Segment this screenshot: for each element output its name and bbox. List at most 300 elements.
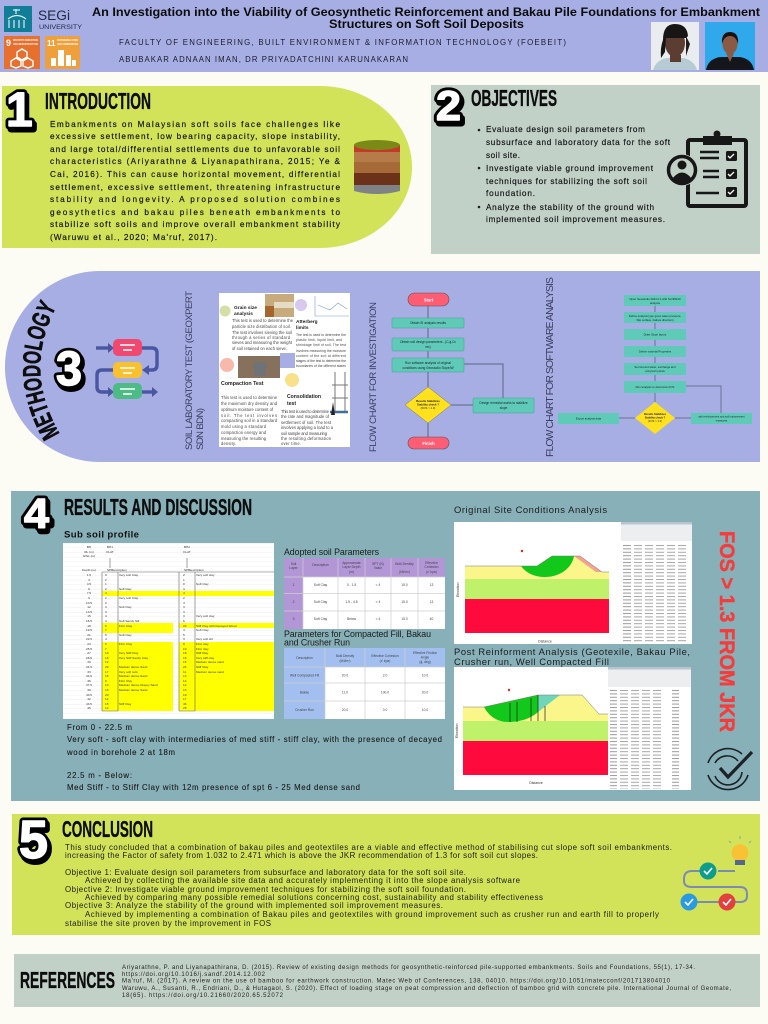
flow chart: software analysis bbox=[558, 295, 752, 434]
BH1 descriptions: Soft Clay bbox=[119, 605, 132, 609]
heading: original site conditions: Original Site Conditions Analysis bbox=[454, 504, 607, 515]
BH1 SPT column: 9 bbox=[105, 679, 107, 683]
table: adopted soil parameters: 1 bbox=[293, 583, 295, 587]
compaction test: the maximum dry density and bbox=[221, 401, 278, 406]
heading: post reinforcement analysis: Post Reinforment Analysis (Geotexile, Bakau Pile, bbox=[454, 646, 690, 657]
depth column: 39 bbox=[87, 688, 91, 692]
BH2 SPT column: 15 bbox=[183, 660, 187, 664]
sub soil description: wood in borehole 2 at 18m bbox=[66, 748, 175, 757]
SDG 9 badge: INDUSTRY INNOVATION bbox=[13, 38, 38, 42]
table: compacted fill parameters bbox=[284, 648, 445, 719]
grain size analysis: The test involves sieving the soil bbox=[232, 330, 292, 335]
table: borehole log: SPT bbox=[107, 568, 113, 572]
decision diamond bbox=[635, 402, 675, 434]
step: ground water: entry/exit points bbox=[645, 369, 665, 373]
depth column: 15 bbox=[87, 614, 91, 618]
chart: post reinforcement analysis bbox=[454, 667, 691, 790]
table: borehole log: FLAT bbox=[183, 550, 191, 554]
number 4: 4 bbox=[24, 490, 50, 537]
grain size analysis: Grain size bbox=[234, 305, 257, 311]
table: compacted fill parameters: 100.0 bbox=[381, 690, 389, 694]
table: adopted soil parameters: 15.0 bbox=[401, 617, 408, 621]
sub soil description: Very soft - soft clay with intermediaries of med stiff - stiff clay, with the presence of decayed bbox=[67, 735, 442, 744]
table: compacted fill parameters: 20.0 bbox=[422, 690, 428, 694]
depth column: 22.5 bbox=[86, 637, 92, 641]
heading: conclusion: CONCLUSION bbox=[62, 816, 153, 842]
table: adopted soil parameters: Description bbox=[312, 563, 329, 567]
number 2: 2 bbox=[436, 82, 461, 129]
compaction test: compaction energy and bbox=[221, 430, 267, 435]
conclusion text: Objective 2: Investigate viable ground improvement techniques for stabilizing the soft soil foundation. bbox=[65, 885, 466, 894]
depth column: 21 bbox=[87, 633, 91, 637]
step: run analysis: Run analysis to determine FOS bbox=[636, 385, 675, 389]
table: adopted soil parameters: 3 bbox=[293, 617, 295, 621]
depth column: 36 bbox=[87, 679, 91, 683]
depth column: 13.5 bbox=[86, 610, 92, 614]
number 4: 4 bbox=[24, 490, 50, 537]
table: compacted fill parameters: Description bbox=[296, 656, 313, 660]
poster title bbox=[92, 5, 760, 31]
BH1 descriptions: Very Stiff Sandy Clay bbox=[119, 656, 148, 660]
step: define material: Define material Properties bbox=[639, 350, 672, 354]
heading: adopted soil parameters: Adopted soil Parameters bbox=[284, 547, 380, 557]
panel: methodology bbox=[5, 271, 760, 462]
BH2 SPT column: 25 bbox=[183, 706, 187, 710]
table: adopted soil parameters: Effective bbox=[425, 561, 438, 565]
reference list: https://doi.org/10.1016/j.sandf.2014.12.002 bbox=[122, 972, 266, 978]
BH2 SPT column: 16 bbox=[183, 651, 187, 655]
BH1 descriptions: Firm Clay bbox=[119, 624, 133, 628]
sub soil description: From 0 - 22.5 m bbox=[67, 723, 132, 732]
table: borehole log: Depth (m) bbox=[82, 568, 96, 572]
SDG 11 badge: SUSTAINABLE CITIES bbox=[57, 39, 78, 42]
step: add reinforcement: add reinforcement and soil improvement bbox=[698, 414, 745, 418]
BH2 SPT column: 4 bbox=[183, 591, 185, 595]
BH2 SPT column: 14 bbox=[183, 683, 187, 687]
BH2 descriptions: Soft Clay bbox=[196, 628, 209, 632]
label: soil laboratory test bbox=[184, 291, 206, 450]
table: borehole log: SPT bbox=[184, 568, 190, 572]
number 3: 3 bbox=[56, 343, 82, 396]
depth column: 18 bbox=[87, 624, 91, 628]
step: define analysis: Slip surface, Failure direction) bbox=[636, 318, 674, 322]
icon: process flow bbox=[96, 339, 158, 399]
table: adopted soil parameters: 40 bbox=[430, 617, 433, 621]
table: adopted soil parameters: < 4 bbox=[376, 583, 380, 587]
chart: original slope analysis bbox=[454, 522, 692, 644]
BH2 SPT column: 1 bbox=[183, 578, 185, 582]
BH2 SPT column: 4 bbox=[183, 628, 185, 632]
consolidation test: Consolidation bbox=[287, 394, 321, 400]
depth column: 30 bbox=[87, 660, 91, 664]
table: borehole log: RL (m) bbox=[84, 550, 94, 554]
table: compacted fill parameters: Effective Cohesion bbox=[371, 654, 399, 658]
BH2 SPT column: 0 bbox=[183, 582, 185, 586]
table: adopted soil parameters: Approximate bbox=[342, 561, 361, 565]
BH2 SPT column: 3 bbox=[183, 605, 185, 609]
step: define analysis bbox=[624, 312, 686, 323]
introduction text: settlement, excessive settlement, threatening infrastructure bbox=[50, 183, 340, 192]
BH2 SPT column: 8 bbox=[183, 642, 185, 646]
atterberg limits: stages of the test to determine the bbox=[296, 359, 346, 363]
finish bbox=[408, 437, 449, 449]
conclusion text: Objective 1: Evaluate design soil parameters from subsurface and laboratory data for the soft soil site. bbox=[65, 868, 466, 877]
table: compacted fill parameters: 10.0 bbox=[422, 708, 428, 712]
BH1 descriptions: Soft Clay bbox=[119, 633, 132, 637]
decision diamond: Stability check ? bbox=[417, 402, 439, 406]
BH1 descriptions: Medium dense Sand bbox=[119, 665, 148, 669]
grain size analysis: This test is used to determine the bbox=[232, 318, 294, 323]
BH1 SPT column: 18 bbox=[105, 656, 109, 660]
step: define material bbox=[624, 346, 686, 357]
BH2 SPT column: 24 bbox=[183, 624, 187, 628]
step: add reinforcement: measures bbox=[716, 418, 728, 422]
panel: references bbox=[14, 954, 760, 1007]
faculty line: FACULTY OF ENGINEERING, BUILT ENVIRONMENT & INFORMATION TECHNOLOGY (FOEBEIT) bbox=[119, 38, 566, 47]
BH2 SPT column: 3 bbox=[183, 587, 185, 591]
consolidation test: settlement of soil. The test bbox=[281, 420, 332, 425]
consolidation test: the rate and magnitude of bbox=[281, 414, 330, 419]
BH2 SPT column: 19 bbox=[183, 693, 187, 697]
BH2 SPT column: 2 bbox=[183, 596, 185, 600]
SEGi University logo: UNIVERSITY bbox=[39, 24, 82, 31]
number 4: 4 bbox=[26, 493, 52, 540]
BH2 SPT column: 6 bbox=[183, 619, 185, 623]
depth column: 27 bbox=[87, 651, 91, 655]
step: draw slope: Draw Slope layout bbox=[644, 332, 667, 336]
BH2 descriptions: Stiff Clay bbox=[196, 651, 209, 655]
step: open geostudio: analysis bbox=[650, 301, 661, 305]
BH1 SPT column: 7 bbox=[105, 647, 107, 651]
BH2 SPT column: 5 bbox=[183, 633, 185, 637]
panel: results and discussion bbox=[11, 490, 760, 801]
objectives bullet list: foundation. bbox=[486, 189, 535, 198]
grain size analysis: particle size distribution of soil. bbox=[232, 324, 291, 329]
BH1 SPT column: 12 bbox=[105, 660, 109, 664]
BH1 SPT column: 20 bbox=[105, 665, 109, 669]
SDG 11 badge bbox=[45, 36, 80, 69]
atterberg limits: involves measuring the moisture bbox=[296, 349, 346, 353]
heading: results and discussion: RESULTS AND DISCUSSION bbox=[64, 494, 252, 520]
table: borehole log bbox=[63, 543, 274, 719]
number 1: 1 bbox=[8, 87, 35, 140]
BH2 descriptions: Firm clay bbox=[196, 647, 209, 651]
step: obtain design parameters: etc) bbox=[425, 345, 431, 349]
depth column: 7.5 bbox=[87, 591, 91, 595]
BH1 SPT column: 0 bbox=[105, 573, 107, 577]
conclusion text bbox=[65, 843, 672, 928]
depth column: 3 bbox=[88, 578, 90, 582]
depth column: 31.5 bbox=[86, 665, 92, 669]
step: ground water: Set Ground water, surcharge and bbox=[634, 365, 676, 369]
BH1 descriptions: Firm Clay bbox=[119, 679, 133, 683]
introduction text: (Waruwu et al., 2020; Ma'ruf, 2017). bbox=[50, 233, 217, 242]
heading: introduction: INTRODUCTION bbox=[45, 88, 151, 114]
table: adopted soil parameters: (c' kpa) bbox=[426, 570, 437, 574]
depth column: 42 bbox=[87, 697, 91, 701]
SEGi University logo: SEGi bbox=[38, 8, 70, 23]
conclusion text: Achieved by implementing a combination of Bakau piles and geotextiles with ground improvement such as crusher run and earth fill to properly bbox=[85, 910, 659, 919]
BH1 SPT column: 2 bbox=[105, 578, 107, 582]
BH2 SPT column: 17 bbox=[183, 697, 187, 701]
BH2 SPT column: 3 bbox=[183, 614, 185, 618]
depth column: 45 bbox=[87, 706, 91, 710]
table: compacted fill parameters: 2.0 bbox=[383, 674, 387, 678]
BH2 descriptions: Medium dense sand bbox=[196, 670, 224, 674]
label: soil laboratory test: SOIL LABORATORY TEST (GEOXPERT bbox=[184, 291, 195, 450]
introduction text: geosythetics and bakau piles beneath embankments to bbox=[50, 208, 340, 217]
SEGi University logo bbox=[4, 6, 82, 32]
table: compacted fill parameters: Crusher Run bbox=[295, 708, 314, 712]
label: flow chart for investigation: FLOW CHART FOR INVESTIGATION bbox=[368, 302, 379, 452]
step: design remedial works: slope bbox=[500, 406, 508, 410]
table: compacted fill parameters: (kN/m³) bbox=[340, 659, 350, 663]
table: adopted soil parameters: 13 bbox=[430, 583, 433, 587]
panel: introduction bbox=[2, 84, 412, 248]
table: adopted soil parameters: < 4 bbox=[376, 600, 380, 604]
table: adopted soil parameters: 13 bbox=[430, 600, 433, 604]
table: adopted soil parameters: Below bbox=[347, 617, 357, 621]
depth column: 24 bbox=[87, 642, 91, 646]
BH1 SPT column: 17 bbox=[105, 670, 109, 674]
BH1 SPT column: 16 bbox=[105, 688, 109, 692]
flow chart: investigation bbox=[392, 293, 534, 449]
grain size analysis: through a series of standard bbox=[232, 335, 291, 340]
step: design remedial works: Design remedial works to stabilize bbox=[479, 401, 528, 405]
heading: objectives: OBJECTIVES bbox=[471, 85, 557, 111]
panel: conclusion bbox=[12, 810, 760, 935]
reference list bbox=[122, 965, 731, 999]
author photo 1 bbox=[651, 22, 699, 70]
step: open geostudio bbox=[624, 295, 686, 306]
BH2 descriptions: Stiff Clay bbox=[196, 665, 209, 669]
authors line: ABUBAKAR ADNAAN IMAN, DR PRIYADATCHINI KARUNAKARAN bbox=[119, 55, 408, 64]
start bbox=[408, 293, 449, 306]
introduction text: Cai, 2016). This can cause horizontal movement, differential bbox=[50, 170, 340, 179]
table: compacted fill parameters: 20.0 bbox=[342, 708, 348, 712]
BH1 SPT column: 18 bbox=[105, 674, 109, 678]
reference list: 18(65). https://doi.org/10.21660/2020.65.52072 bbox=[122, 993, 284, 999]
poster title: An Investigation into the Viability of Geosynthetic Reinforcement and Bakau Pile Foundations for Embankment bbox=[92, 5, 760, 19]
atterberg limits: limits bbox=[296, 325, 309, 331]
BH1 SPT column: 3 bbox=[105, 610, 107, 614]
number 5: 5 bbox=[19, 810, 48, 870]
BH2 SPT column: 11 bbox=[183, 670, 186, 674]
depth column: 37.5 bbox=[86, 683, 92, 687]
atterberg limits bbox=[295, 296, 349, 368]
sub soil description: 22.5 m - Below: bbox=[67, 771, 132, 780]
compaction test: optimum moisture content of bbox=[221, 407, 274, 412]
BH1 SPT column: 12 bbox=[105, 697, 109, 701]
sub soil description: Med Stiff - to Stiff Clay with 12m presence of spt 6 - 25 Med dense sand bbox=[67, 783, 360, 792]
objectives bullet list: subsurface and laboratory data for the soft bbox=[486, 138, 671, 147]
objectives bullet list: Analyze the stability of the ground with bbox=[486, 203, 654, 212]
atterberg limits: shrinkage limit of soil. The test bbox=[296, 343, 346, 347]
depth column: 9 bbox=[88, 596, 90, 600]
number 2: 2 bbox=[438, 85, 463, 132]
BH1 descriptions: Medium dense Clayey Sand bbox=[119, 683, 158, 687]
step: obtain design parameters bbox=[392, 338, 464, 351]
heading: methodology (curved along the panel edge): METHODOLOGY bbox=[22, 298, 60, 442]
table: adopted soil parameters: 15.0 bbox=[401, 600, 408, 604]
software results window bbox=[621, 522, 692, 644]
introduction text: and large total/differential settlements due to unfavorable soil bbox=[50, 145, 340, 154]
table: compacted fill parameters: Bulk Density bbox=[336, 654, 355, 658]
heading: post reinforcement analysis bbox=[454, 646, 690, 667]
header band bbox=[0, 0, 768, 72]
number 3: 3 bbox=[58, 346, 84, 399]
BH1 SPT column: 5 bbox=[105, 633, 107, 637]
number 5: 5 bbox=[21, 813, 50, 873]
objectives bullet list: Evaluate design soil parameters from bbox=[486, 125, 645, 134]
BH1 SPT column: 2 bbox=[105, 596, 107, 600]
conclusion text: stabilise the site proven by the improvement in FOS bbox=[65, 919, 271, 928]
consolidation test: over time. bbox=[281, 441, 301, 446]
step: add reinforcement bbox=[691, 413, 752, 424]
table: adopted soil parameters: Soft Clay bbox=[314, 583, 328, 587]
compaction test bbox=[220, 353, 295, 446]
compaction test: soil. The test involves bbox=[221, 413, 277, 418]
introduction text: stability and longevity. A proposed solution combines bbox=[50, 195, 340, 204]
depth column: 34.5 bbox=[86, 674, 92, 678]
depth column: 25.5 bbox=[86, 647, 92, 651]
table: adopted soil parameters: Layer bbox=[289, 566, 299, 570]
BH1 descriptions: Soft Sandy Silt bbox=[119, 619, 139, 623]
conclusion text: Objective 3: Analyze the stability of the ground with implemented soil improvement measures. bbox=[65, 901, 443, 910]
table: adopted soil parameters: < 4 bbox=[376, 617, 380, 621]
step: ground water bbox=[624, 363, 686, 375]
depth column: 4.5 bbox=[87, 582, 91, 586]
step: define analysis: Define analysis type (pore water pressure, bbox=[629, 314, 681, 318]
step: run software analysis: Run software analysis of original bbox=[405, 361, 451, 365]
step: obtain SI results bbox=[392, 318, 464, 328]
BH2 SPT column: 2 bbox=[183, 573, 185, 577]
consolidation test: test bbox=[287, 401, 296, 407]
introduction text: stabilize soft soils and improve overall embankment stability bbox=[50, 220, 341, 229]
BH1 SPT column: 15 bbox=[105, 702, 109, 706]
step: run analysis bbox=[624, 381, 686, 393]
label: soil laboratory test: SDN BDN) bbox=[195, 408, 206, 450]
BH2 SPT column: 46 bbox=[183, 702, 187, 706]
heading: references: REFERENCES bbox=[20, 967, 115, 993]
heading: compacted fill parameters bbox=[284, 629, 431, 648]
chart: post reinforcement analysis: Distance bbox=[529, 781, 543, 785]
BH2 descriptions: Medium dense sand bbox=[196, 660, 224, 664]
table: borehole log: BH1 bbox=[107, 545, 113, 549]
depth column: 6 bbox=[88, 587, 90, 591]
introduction text: Embankments on Malaysian soft soils face challenges like bbox=[50, 120, 340, 129]
BH2 SPT column: 24 bbox=[183, 665, 187, 669]
step: export: Export analysis data bbox=[576, 416, 602, 420]
BH2 SPT column: 4 bbox=[183, 601, 185, 605]
label: flow chart for software analysis: FLOW CHART FOR SOFTWARE ANALYSIS bbox=[545, 277, 556, 457]
objectives bullet list: implemented soil improvement measures. bbox=[486, 215, 665, 224]
compaction test: density. bbox=[221, 441, 236, 446]
number 1: 1 bbox=[6, 84, 33, 137]
BH1 descriptions: Firm Clay bbox=[119, 642, 133, 646]
author photo 2 bbox=[705, 22, 755, 70]
BH1 descriptions: Medium dense Sand bbox=[119, 674, 148, 678]
table: adopted soil parameters: (m) bbox=[349, 570, 354, 574]
conclusion text: increasing the Factor of safety from 1.032 to 2.471 which is above the JKR recommendation of 1.3 for soft soil cut slopes. bbox=[65, 851, 538, 860]
table: compacted fill parameters: 0.0 bbox=[383, 708, 387, 712]
decision diamond: Results Stabilizes bbox=[644, 412, 667, 416]
table: adopted soil parameters bbox=[284, 558, 445, 629]
depth column: 1.5 bbox=[87, 573, 91, 577]
objectives bullet list bbox=[478, 125, 671, 224]
compaction test: compacting soil in a standard bbox=[221, 418, 278, 423]
decision diamond bbox=[405, 387, 451, 423]
BH1 SPT column: 6 bbox=[105, 624, 107, 628]
BH2 descriptions: Stiff Clay with Decayed Wood bbox=[196, 624, 237, 628]
BH2 descriptions: Very stiff clay bbox=[196, 656, 215, 660]
BH1 descriptions: Stiff Clay bbox=[119, 702, 132, 706]
depth column: 43.5 bbox=[86, 702, 92, 706]
table: adopted soil parameters: Cohesion bbox=[425, 565, 439, 569]
finish: Finish bbox=[422, 441, 435, 446]
BH1 descriptions: Very soft rock bbox=[119, 670, 138, 674]
consolidation test: soil sample and measuring bbox=[281, 431, 328, 436]
BH1 descriptions: Very soft Clay bbox=[119, 596, 139, 600]
SDG 9 badge: 9 bbox=[6, 38, 11, 48]
depth column: 28.5 bbox=[86, 656, 92, 660]
icon: circular check bbox=[708, 749, 752, 790]
panel: laboratory tests card bbox=[219, 293, 350, 447]
BH1 descriptions: Very soft Clay bbox=[119, 573, 139, 577]
BH1 SPT column: 20 bbox=[105, 693, 109, 697]
sub soil description bbox=[66, 723, 442, 792]
grain size analysis: sieves and measuring the weight bbox=[232, 340, 293, 345]
heading: compacted fill parameters: Parameters for Compacted Fill, Bakau bbox=[284, 629, 431, 639]
atterberg limits: Atterberg bbox=[296, 319, 318, 325]
step: obtain SI results: Obtain SI analysis results bbox=[410, 321, 446, 325]
depth column: 16.5 bbox=[86, 619, 92, 623]
heading: compacted fill parameters: and Crusher Run bbox=[284, 638, 350, 648]
consolidation test: This test is used to determine bbox=[281, 409, 330, 414]
reference list: Waruwu, A., Susanti, R., Endriani, D., & Hutagaol, S. (2020). Effect of loading stage on peat compression and deflection of bamboo grid with concrete pile. International Journal of Geomate, bbox=[122, 986, 731, 992]
table: borehole log: GWL (m) bbox=[83, 554, 95, 558]
start: Start bbox=[424, 298, 434, 302]
BH1 SPT column: 4 bbox=[105, 614, 107, 618]
atterberg limits: The test is used to determine the bbox=[296, 333, 346, 337]
heading: post reinforcement analysis: Crusher run, Well Compacted Fill bbox=[454, 656, 609, 667]
conclusion text: This study concluded that a combination of bakau piles and geotextiles are a viable and effective method of stabilising cut slope soft soil embankments. bbox=[65, 843, 672, 852]
table: adopted soil parameters: Bulk Density bbox=[395, 562, 414, 566]
SDG 9 badge: AND INFRASTRUCTURE bbox=[13, 42, 38, 46]
BH2 descriptions: Very soft clay bbox=[196, 573, 215, 577]
SDG 9 badge bbox=[4, 36, 40, 69]
BH2 SPT column: 14 bbox=[183, 679, 187, 683]
BH1 SPT column: 10 bbox=[105, 651, 109, 655]
atterberg limits: content of the soil at different bbox=[296, 354, 346, 358]
compaction test: mold using a standard bbox=[221, 424, 267, 429]
BH1 descriptions: Very Stiff Clay bbox=[119, 651, 139, 655]
BH2 SPT column: 10 bbox=[183, 647, 187, 651]
icon: idea checklist path bbox=[680, 836, 751, 910]
decision diamond: Results Stabilizes bbox=[416, 399, 440, 403]
table: compacted fill parameters: 11.0 bbox=[342, 690, 348, 694]
BH1 SPT column: 2 bbox=[105, 587, 107, 591]
BH2 SPT column: 16 bbox=[183, 656, 187, 660]
atterberg limits: boundaries of the different states bbox=[296, 364, 346, 368]
table: adopted soil parameters: Value bbox=[374, 566, 382, 570]
BH1 SPT column: 4 bbox=[105, 619, 107, 623]
step: obtain design parameters: Obtain soil design parameters - (C,ϕ,Cc bbox=[400, 340, 456, 344]
software results window bbox=[608, 667, 691, 790]
table: adopted soil parameters: 0 - 1.5 bbox=[347, 583, 356, 587]
table: compacted fill parameters: (ϕ, deg) bbox=[419, 660, 431, 664]
table: adopted soil parameters: Soil bbox=[291, 562, 297, 566]
